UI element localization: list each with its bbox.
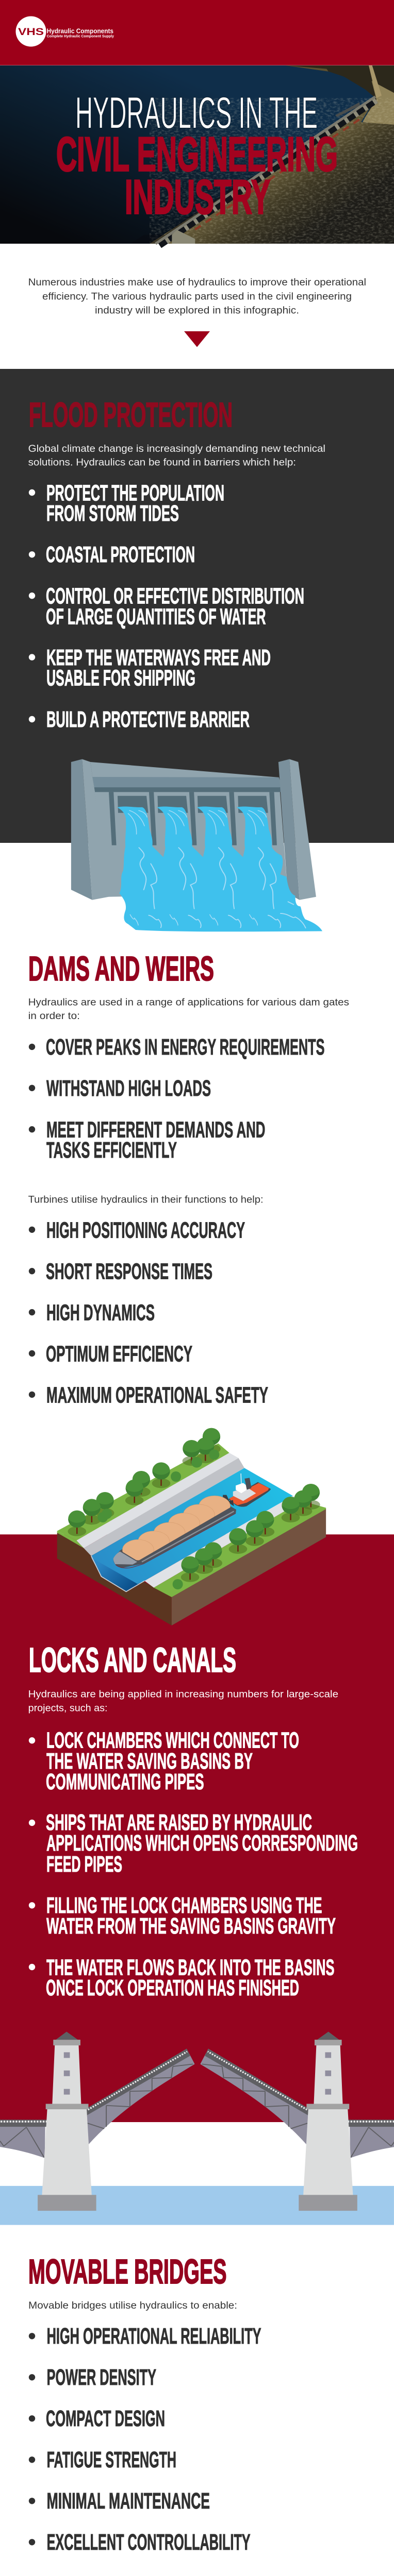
turbines bullet list: SHORT RESPONSE TIMES <box>46 1259 212 1284</box>
logo name: Hydraulic Components <box>47 27 113 35</box>
panel: flood protection <box>0 369 394 843</box>
bridges bullet list: COMPACT DESIGN <box>46 2406 165 2431</box>
dams bullet list <box>29 1035 325 1163</box>
logo tagline: Complete Hydraulic Component Supply <box>47 35 114 38</box>
flood bullet list: FROM STORM TIDES <box>46 501 179 526</box>
turbines bullet list: HIGH DYNAMICS <box>46 1301 155 1326</box>
turbines bullet list <box>29 1218 268 1408</box>
illustration: canal with barge <box>57 1428 326 1625</box>
flood intro text: solutions. Hydraulics can be found in barriers which help: <box>28 457 296 468</box>
header band with logo <box>0 0 394 65</box>
turbines bullet list: OPTIMUM EFFICIENCY <box>46 1342 192 1367</box>
illustration: dam with water <box>71 759 322 931</box>
heading: movable bridges: MOVABLE BRIDGES <box>28 2252 227 2291</box>
bridges bullet list: MINIMAL MAINTENANCE <box>47 2489 210 2514</box>
flood intro text <box>28 444 325 468</box>
flood bullet list <box>29 481 304 732</box>
locks bullet list: THE WATER SAVING BASINS BY <box>46 1749 253 1774</box>
locks intro text <box>28 1689 338 1714</box>
bridges bullet list: EXCELLENT CONTROLLABILITY <box>47 2530 251 2555</box>
locks bullet list: COMMUNICATING PIPES <box>46 1770 204 1794</box>
hero photo <box>0 65 394 246</box>
locks intro text: projects, such as: <box>28 1703 107 1714</box>
panel: dams and weirs <box>28 950 349 1408</box>
locks bullet list <box>29 1728 358 2001</box>
logo VHS: VHS <box>18 27 44 38</box>
flood bullet list: USABLE FOR SHIPPING <box>46 666 195 691</box>
locks bullet list: FEED PIPES <box>46 1852 122 1877</box>
panel: movable bridges <box>28 2252 261 2555</box>
flood bullet list: PROTECT THE POPULATION <box>46 481 224 506</box>
flood bullet list: COASTAL PROTECTION <box>46 543 195 567</box>
panel: locks and canals <box>0 1534 394 2122</box>
logo circle <box>15 16 46 46</box>
flood bullet list: BUILD A PROTECTIVE BARRIER <box>46 707 250 732</box>
intro text: Numerous industries make use of hydraulics to improve their operational <box>28 277 366 288</box>
dams intro text: in order to: <box>28 1011 80 1022</box>
bridges bullet list: POWER DENSITY <box>47 2365 156 2390</box>
title line 3: INDUSTRY <box>125 170 270 224</box>
dams bullet list: WITHSTAND HIGH LOADS <box>46 1076 211 1101</box>
heading: dams and weirs: DAMS AND WEIRS <box>28 950 214 988</box>
dams intro text <box>28 997 349 1022</box>
dams bullet list: TASKS EFFICIENTLY <box>46 1138 177 1163</box>
intro text <box>28 277 366 316</box>
arrow down <box>184 331 210 347</box>
bridges intro text: Movable bridges utilise hydraulics to enable: <box>28 2300 237 2311</box>
flood intro text: Global climate change is increasingly demanding new technical <box>28 444 325 454</box>
turbines intro text: Turbines utilise hydraulics in their functions to help: <box>28 1194 264 1206</box>
locks intro text: Hydraulics are being applied in increasing numbers for large-scale <box>28 1689 338 1700</box>
bridges bullet list <box>29 2324 261 2555</box>
heading: locks and canals: LOCKS AND CANALS <box>29 1641 236 1680</box>
hero photo of dam with title <box>0 65 394 246</box>
turbines bullet list: HIGH POSITIONING ACCURACY <box>46 1218 245 1243</box>
intro text: industry will be explored in this infographic. <box>95 305 299 316</box>
illustration: bascule bridge <box>0 2031 394 2225</box>
heading: flood protection: FLOOD PROTECTION <box>29 396 233 434</box>
intro text: efficiency. The various hydraulic parts used in the civil engineering <box>42 291 352 302</box>
bridges bullet list: FATIGUE STRENGTH <box>47 2448 176 2472</box>
dams intro text: Hydraulics are used in a range of applications for various dam gates <box>28 997 349 1008</box>
